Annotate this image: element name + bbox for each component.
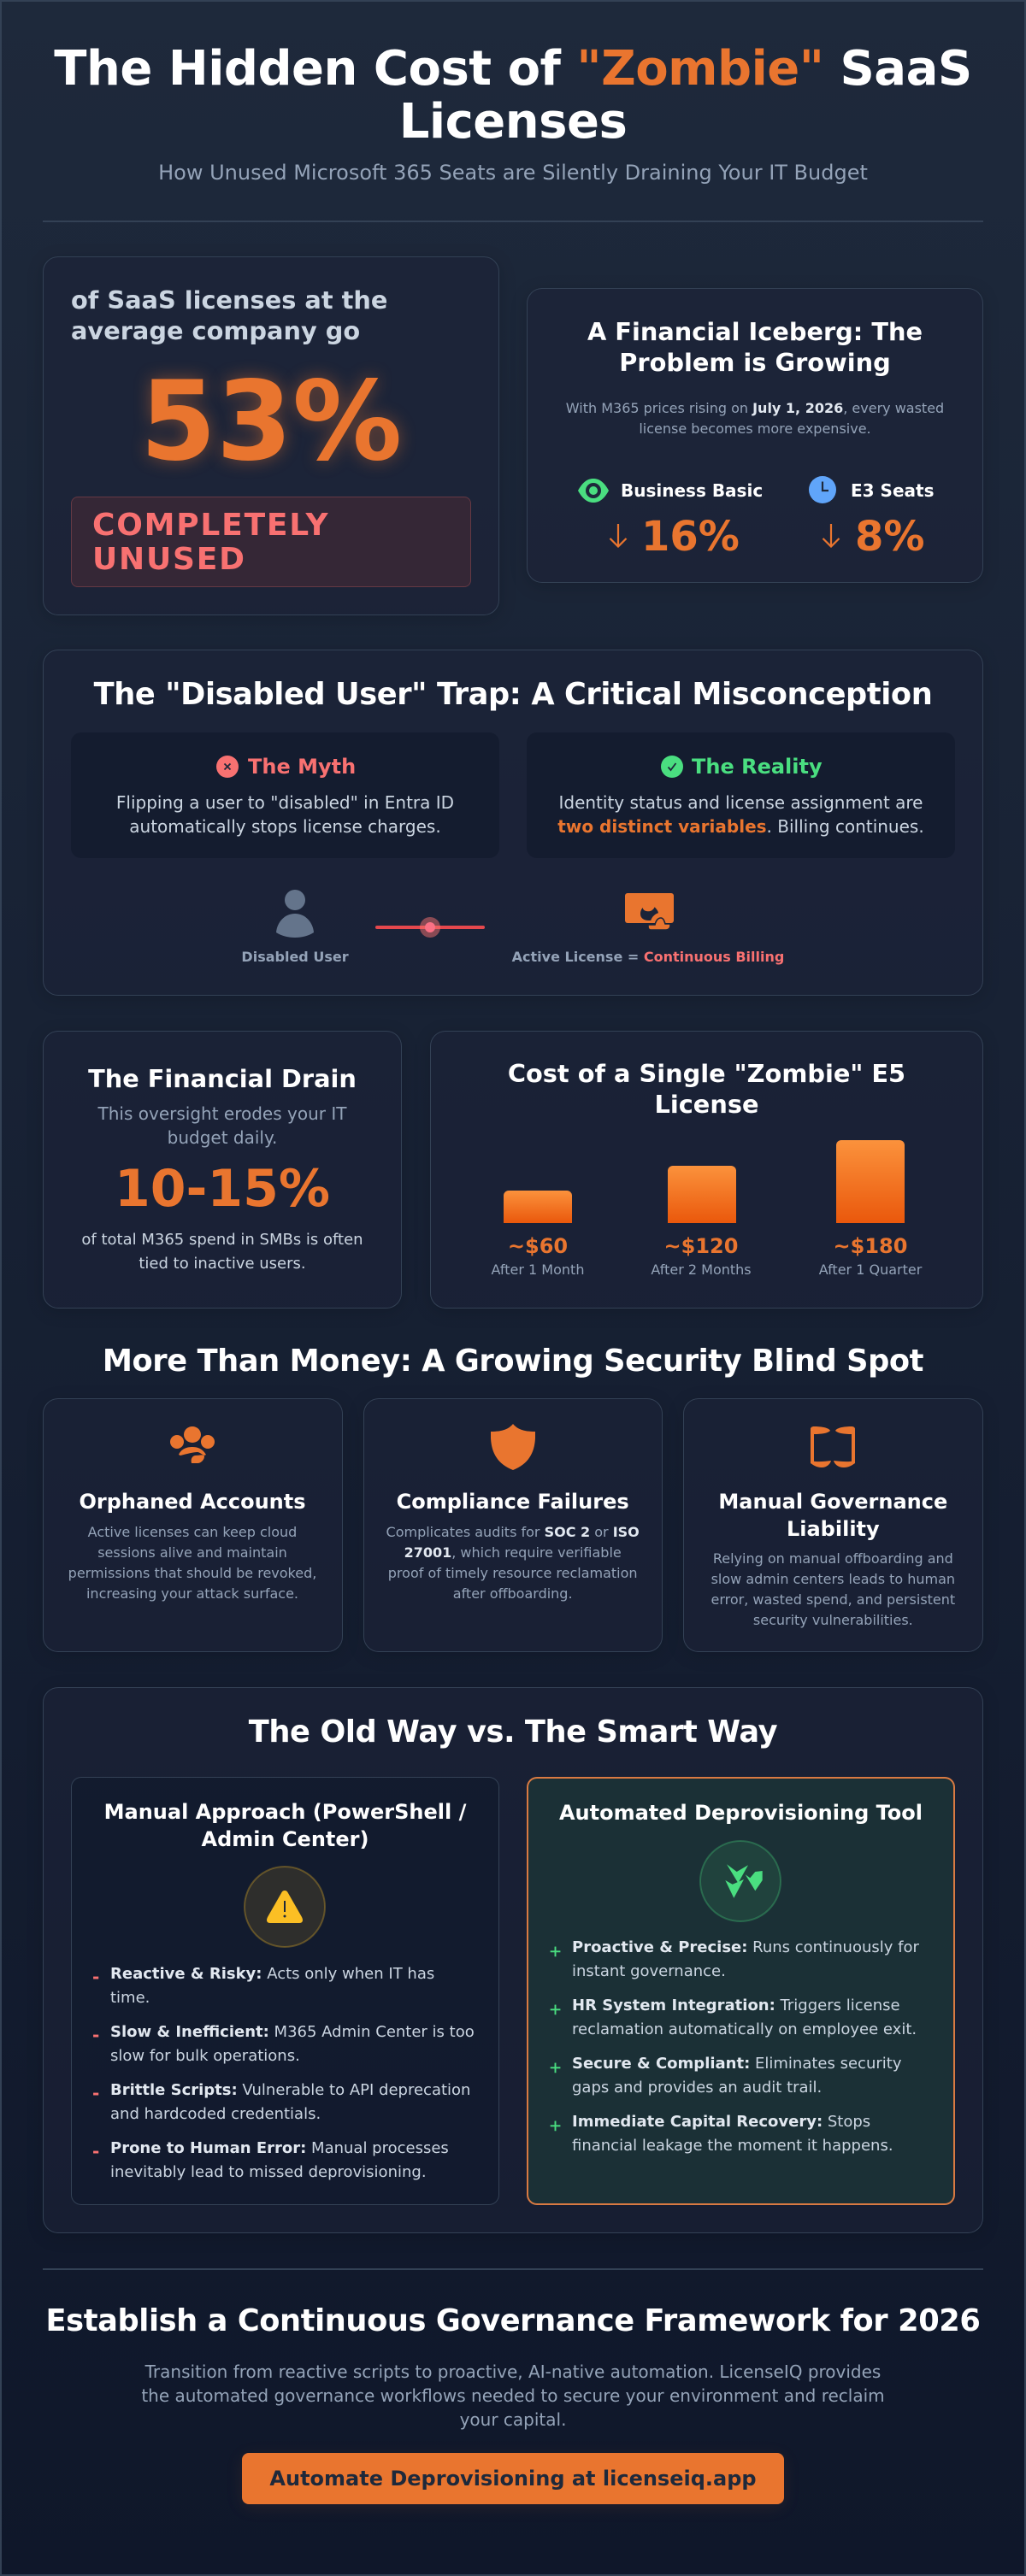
value: ~$180 [834,1234,907,1258]
icon: clock [809,476,836,503]
completely unused callout [71,497,471,587]
item 4 [549,2110,942,2158]
card text: after offboarding. [453,1585,573,1602]
minus marker: - [92,1967,99,1987]
value 16%: 16% [641,513,740,561]
label: E3 Seats [851,480,934,501]
reality text: two distinct variables. Billing continues. [557,816,924,837]
comparison heading: The Old Way vs. The Smart Way [249,1714,777,1750]
icon: check [661,756,683,778]
item text [110,2137,449,2185]
drain subtitle: This oversight erodes your IT [98,1103,346,1124]
minus marker: - [92,2083,99,2103]
item text: Slow & Inefficient: M365 Admin Center is too [110,2023,475,2041]
chart heading: Cost of a Single "Zombie" E5 [508,1059,905,1088]
myth label: The Myth [248,755,356,779]
card text: Complicates audits for SOC 2 or ISO [386,1524,640,1540]
item text: reclamation automatically on employee exit. [572,2020,917,2038]
card text: error, wasted spend, and persistent [711,1591,955,1608]
iceberg heading: Problem is Growing [619,348,891,377]
caption: After 1 Quarter [819,1262,922,1278]
item 1 [549,1936,942,1984]
item text [572,1936,919,1984]
icon: active license monitor [625,893,674,930]
card title: Orphaned Accounts [79,1490,306,1514]
icon: disabled user [276,890,314,938]
stat: e3 seats [809,476,934,561]
value 8%: 8% [855,513,925,561]
big number 53%: 53% [140,358,402,485]
item text: Proactive & Precise: Runs continuously for [572,1938,919,1956]
panel: compliance failures [363,1398,663,1652]
list: automated benefits [527,1936,955,2167]
closing text: Transition from reactive scripts to proactive, AI-native automation. LicenseIQ provides [145,2361,881,2382]
item 1 [92,1965,434,2007]
call to action button: Automate Deprovisioning at licenseiq.app [269,2467,757,2491]
drain note: tied to inactive users. [139,1255,306,1273]
drain note [81,1231,363,1273]
plus marker: + [549,2001,562,2019]
value: ~$120 [664,1234,738,1258]
iceberg heading [587,317,923,377]
card text: sessions alive and maintain [97,1544,287,1561]
card text: Relying on manual offboarding and [713,1550,953,1567]
card text [68,1524,316,1602]
title: Licenses [399,94,627,150]
drain subtitle [97,1103,347,1148]
closing text: the automated governance workflows needed to secure your environment and reclaim [141,2385,885,2406]
stat 10-15%: 10-15% [115,1159,330,1219]
closing text [0,2360,1026,2432]
iceberg text: With M365 prices rising on July 1, 2026, every wasted [566,400,944,416]
closing text: your capital. [460,2409,566,2430]
item text: Immediate Capital Recovery: Stops [572,2113,870,2131]
statistic lead-in text: of SaaS licenses at the [71,285,387,315]
title [54,41,972,150]
manual heading: Admin Center) [202,1827,369,1851]
icon: recycling arrows [699,1840,781,1922]
panel: old way vs smart way [43,1687,983,2233]
caption: After 1 Month [492,1262,584,1278]
plus marker: + [549,2117,562,2135]
panel: 53% statistic [43,256,499,615]
icon: down arrow [609,524,628,548]
item text: Prone to Human Error: Manual processes [110,2139,449,2157]
plus marker: + [549,1943,562,1961]
value: ~$60 [508,1234,568,1258]
card text: security vulnerabilities. [753,1612,913,1628]
item text: HR System Integration: Triggers license [572,1997,900,2014]
item text: inevitably lead to missed deprovisioning. [110,2163,427,2181]
card text: 27001, which require verifiable [404,1544,622,1561]
item 3 [549,2052,942,2100]
item text [572,1994,917,2042]
completely unused callout: COMPLETELY [92,508,329,543]
item text: Secure & Compliant: Eliminates security [572,2055,901,2073]
item text: time. [110,1989,150,2007]
icon: cross [216,756,239,778]
icon: warning [244,1866,326,1948]
item text: slow for bulk operations. [110,2047,300,2065]
card text [711,1550,955,1628]
item text [110,2023,475,2065]
item 4 [92,2137,486,2185]
item text: financial leakage the moment it happens. [572,2137,893,2155]
security heading: More Than Money: A Growing Security Blind Spot [103,1344,923,1379]
bar shape [836,1140,905,1223]
panel: disabled user trap [43,650,983,996]
icon: down arrow [823,524,840,548]
minus marker: - [92,2025,99,2045]
statistic lead-in text [71,285,387,345]
disabled user label: Disabled User [241,949,349,965]
icon: open book [811,1426,855,1467]
card text: increasing your attack surface. [86,1585,298,1602]
drain heading: The Financial Drain [88,1064,357,1093]
icon: paw [170,1426,215,1463]
item text [110,2081,470,2123]
iceberg heading: A Financial Iceberg: The [587,317,923,346]
active license label: Active License = Continuous Billing [512,949,784,965]
panel: manual approach [71,1777,499,2205]
completely unused callout: UNUSED [92,542,246,577]
item text: and hardcoded credentials. [110,2105,321,2123]
manual heading: Manual Approach (PowerShell / [104,1800,466,1824]
stat: business basic [578,479,763,561]
item text [110,1965,434,2007]
card title: Liability [787,1517,880,1541]
panel: orphaned accounts [43,1398,343,1652]
plus marker: + [549,2059,562,2077]
bar shape [668,1166,736,1223]
icon: shield [491,1424,535,1470]
card text: Active licenses can keep cloud [88,1524,297,1540]
drain note: of total M365 spend in SMBs is often [81,1231,363,1249]
automated heading: Automated Deprovisioning Tool [559,1801,923,1825]
card text: slow admin centers leads to human [711,1571,955,1587]
card title: Manual Governance [718,1490,947,1514]
list: manual drawbacks [92,1965,475,2181]
call to action button [242,2453,784,2504]
item 3 [92,2081,470,2123]
bar shape [504,1191,572,1223]
drain subtitle: budget daily. [168,1127,277,1148]
myth text: Flipping a user to "disabled" in Entra ID [116,792,454,813]
manual heading [104,1800,467,1851]
closing heading: Establish a Continuous Governance Framework for 2026 [46,2303,980,2338]
card text [386,1524,640,1602]
panel: financial drain [43,1031,402,1309]
panel: cost bar chart [430,1031,983,1309]
card title: Compliance Failures [397,1490,629,1514]
chart heading [508,1059,905,1119]
card text: proof of timely resource reclamation [388,1565,638,1581]
reality text: Identity status and license assignment are [558,792,923,813]
minus marker: - [92,2141,99,2161]
item text [572,2110,893,2158]
card title [718,1490,947,1541]
title: The Hidden Cost of "Zombie" SaaS [54,41,972,97]
reality text [557,792,924,837]
reality box [527,732,955,858]
bar: one quarter [819,1140,922,1278]
statistic lead-in text: average company go [71,316,360,345]
chart heading: License [655,1090,759,1119]
card text: permissions that should be revoked, [68,1565,316,1581]
myth box [71,732,499,858]
label: Business Basic [621,480,763,501]
broken link connector [375,917,485,938]
myth text: automatically stops license charges. [129,816,441,837]
item text: gaps and provides an audit trail. [572,2079,822,2097]
bar: one month [491,1191,584,1278]
item 2 [92,2023,475,2065]
iceberg text: license becomes more expensive. [639,421,871,437]
panel: automated tool [527,1777,955,2205]
trap heading: The "Disabled User" Trap: A Critical Misconception [94,677,932,712]
icon: eye [578,479,609,503]
subtitle: How Unused Microsoft 365 Seats are Silently Draining Your IT Budget [158,161,868,185]
item text: instant governance. [572,1962,726,1980]
item 2 [549,1994,942,2042]
panel: financial iceberg [527,288,983,583]
iceberg text [566,400,944,437]
reality label: The Reality [692,755,823,779]
item text: Brittle Scripts: Vulnerable to API deprecation [110,2081,470,2099]
bar: two months [651,1166,752,1278]
myth text [116,792,454,837]
item text [572,2052,901,2100]
caption: After 2 Months [651,1262,752,1278]
panel: manual governance [683,1398,983,1652]
item text: Reactive & Risky: Acts only when IT has [110,1965,434,1983]
